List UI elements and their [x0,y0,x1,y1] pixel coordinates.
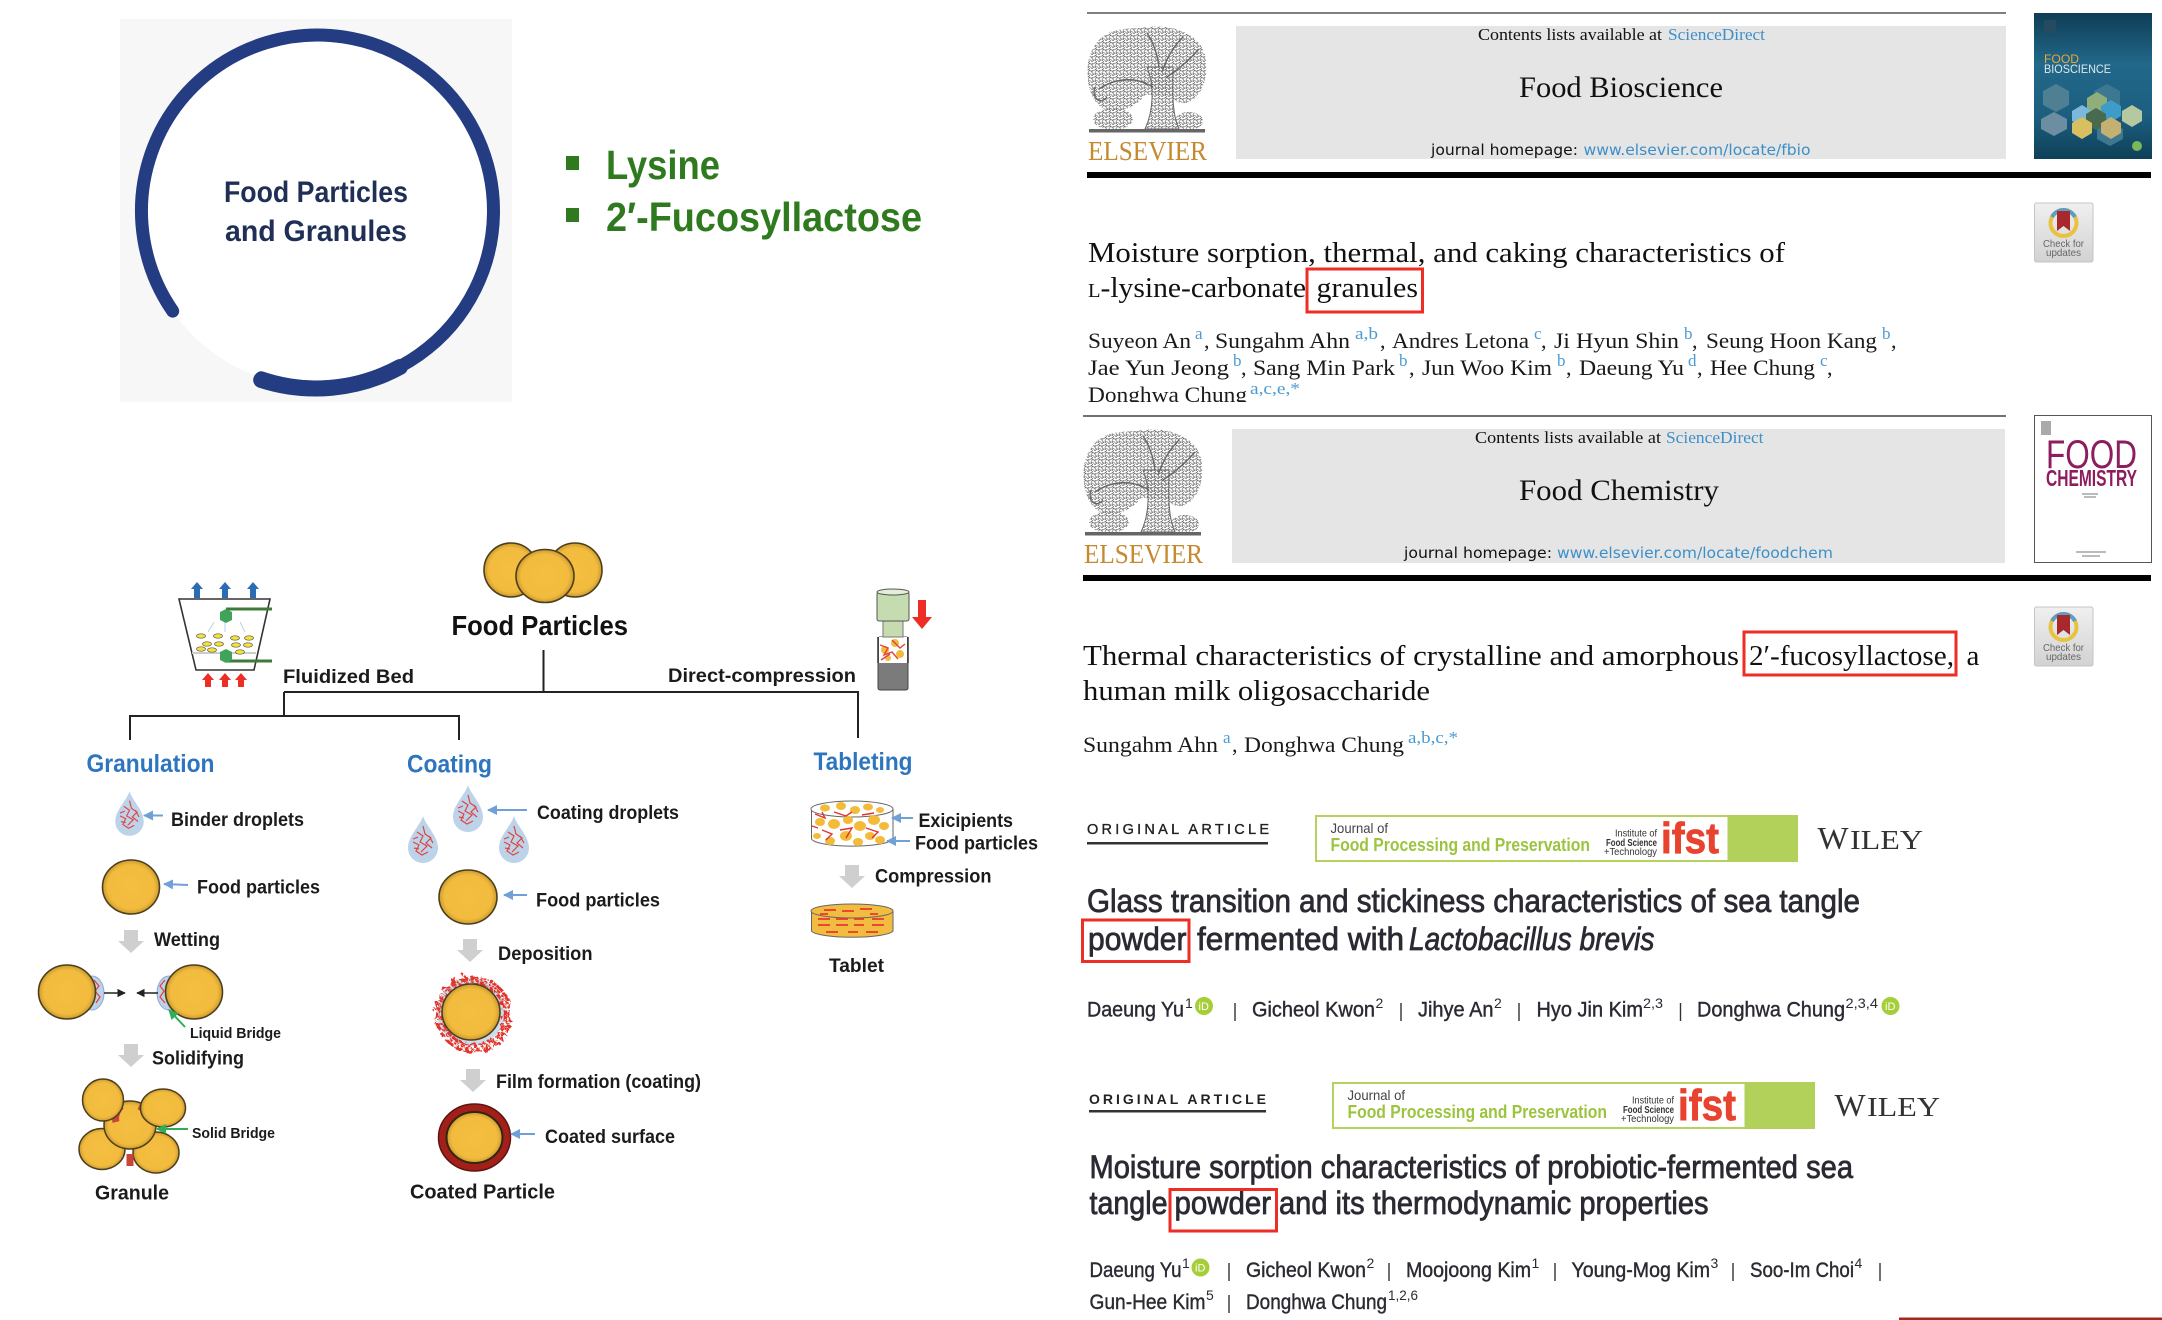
highlight box: granules [1307,269,1422,312]
journal banner: Food Chemistry [1519,474,1719,507]
heading: food particles: Food Particles [452,610,628,641]
journal banner: Food Processing and Preservation [1330,835,1590,855]
authors: sea tangle article: Gicheol Kwon [1252,998,1375,1022]
logo: elsevier tree: ELSEVIER [1084,539,1203,569]
column: tableting [811,748,1038,977]
icon: granule [79,1079,186,1173]
heading: food particles and granules: and Granules [225,215,407,248]
icon: check for updates: updates [2046,651,2081,663]
heading: granulation: Granulation [86,750,214,778]
article title: sea tangle glass transition: fermented with [1197,921,1404,957]
article title: lysine granules [1088,237,1785,312]
arrow: binder droplet pointer [144,814,163,816]
authors: food bioscience article: a [1195,324,1203,343]
authors: sea tangle article: 1 [1185,995,1193,1011]
authors: food bioscience article: d [1688,351,1697,370]
journal banner: ScienceDirect [1668,25,1765,44]
journal cover: food chemistry [2034,416,2152,562]
article title: sea tangle glass transition: Lactobacillus brevis [1409,921,1654,957]
journal banner: Food Science [1606,838,1657,849]
authors: food bioscience article: , [1692,328,1698,353]
label: original article: ORIGINAL ARTICLE [1089,1091,1266,1107]
authors: food bioscience article: Suyeon An [1088,328,1191,353]
authors: food bioscience article: , [1241,355,1246,380]
icon: particle with deposited droplets [434,975,508,1049]
journal banner: ifst [1661,814,1719,863]
icon: check for updates: updates [2046,247,2081,259]
label: direct-compression: Direct-compression [668,666,856,687]
bullet list: lysine and fucosyllactose [566,142,922,240]
authors: food bioscience article: , [1204,328,1210,353]
icon: wetted particles with liquid bridge [38,965,222,1019]
label: granule: Granule [95,1182,169,1204]
arrow: coated surface pointer [511,1133,535,1135]
authors: food bioscience article: Jae Yun Jeong [1088,355,1229,380]
heading: coating: Coating [407,750,492,778]
label: solid bridge: Solid Bridge [192,1125,275,1142]
authors: probiotic sea tangle article: Young-Mog Kim [1572,1258,1710,1282]
journal banner: journal homepage: [1403,544,1552,562]
label: binder droplets: Binder droplets [171,810,304,831]
arrow: food particle pointer [504,894,527,896]
label: original article: ORIGINAL ARTICLE [1087,822,1269,838]
journal banner [1236,25,2006,159]
authors: probiotic sea tangle article: Daeung Yu [1090,1258,1182,1282]
arrow: film formation step [460,1069,486,1092]
arrow: wetting step [118,930,144,953]
authors: sea tangle article: iD [1198,1001,1209,1013]
icon: coated particle [438,1104,510,1171]
article title: fucosyllactose: 2′-fucosyllactose, [1749,640,1954,672]
bullet list: lysine and fucosyllactose: 2′-Fucosyllactose [606,194,922,240]
heading: food particles and granules [224,176,408,248]
authors: probiotic sea tangle article: 1 [1532,1255,1540,1271]
journal banner: www.elsevier.com/locate/fbio [1584,141,1810,159]
authors: sea tangle article: 2 [1494,995,1502,1011]
article title: probiotic sea tangle: tangle [1090,1185,1168,1221]
authors: sea tangle article: 2,3,4 [1846,995,1878,1011]
arrow: solidifying step [118,1044,144,1067]
label: food particles: Food particles [197,878,320,898]
journal banner: Food Bioscience [1519,71,1723,104]
diagram: food particle processing tree [38,543,1038,1204]
label: food particles: Food particles [915,834,1038,854]
authors: probiotic sea tangle article: iD [1195,1262,1205,1274]
black divider bar [1087,172,2151,178]
logo: wiley: ILEY [1850,825,1923,855]
article title: sea tangle glass transition: Glass transition and stickiness characteristics of sea tangle [1087,883,1860,919]
article title: probiotic sea tangle: Moisture sorption characteristics of probiotic-fermented sea [1090,1149,1853,1185]
panel: circle title card [120,19,512,402]
black divider bar [1083,575,2151,581]
bullet list: lysine and fucosyllactose: Lysine [606,142,720,188]
authors: food chemistry article: , [1232,732,1238,757]
highlight box: 2'-fucosyllactose [1744,632,1956,675]
authors: sea tangle article [1087,995,1900,1022]
authors: food bioscience article: , [1566,355,1572,380]
label: tablet: Tablet [829,956,885,977]
arrow: coating droplet pointer [488,809,527,811]
logo: wiley: W [1834,1087,1866,1123]
article title: fucosyllactose: a [1966,640,1980,672]
journal banner: ScienceDirect [1666,428,1764,447]
authors: probiotic sea tangle article: Gun-Hee Kim [1090,1290,1206,1314]
authors: food chemistry article: Donghwa Chung [1244,732,1404,757]
article header: food chemistry [1083,416,2152,581]
journal cover: food bioscience: BIOSCIENCE [2044,62,2111,76]
authors: food bioscience article: , [1891,328,1896,353]
authors: food chemistry article: Sungahm Ahn [1083,732,1218,757]
journal cover: food chemistry: FOOD [2046,433,2137,477]
icon: check for updates: Check for [2043,642,2084,654]
authors: food bioscience article: Daeung Yu [1579,355,1684,380]
label: coated particle: Coated Particle [410,1182,555,1204]
journal banner: Institute of [1632,1096,1674,1106]
authors: food bioscience article: Donghwa Chung [1088,382,1247,407]
article header: food bioscience [1087,13,2152,178]
authors: probiotic sea tangle article: 2 [1366,1255,1374,1271]
authors: food bioscience article [1088,324,1896,407]
journal banner [1232,428,2005,563]
article title: probiotic sea tangle: and its thermodynamic properties [1279,1185,1708,1221]
journal banner: ifst [1678,1081,1736,1130]
logo: elsevier tree [1087,26,1207,166]
icon: three food particles [484,543,602,602]
authors: food bioscience article: b [1557,351,1566,370]
article title: probiotic sea tangle: powder [1174,1185,1271,1221]
label: deposition: Deposition [498,944,592,965]
authors: food bioscience article: , [1380,328,1386,353]
journal banner: www.elsevier.com/locate/foodchem [1557,544,1833,562]
authors: food bioscience article: b [1882,324,1890,343]
label: solidifying: Solidifying [152,1048,244,1070]
authors: sea tangle article: Jihye An [1418,998,1494,1022]
journal banner: Journal of [1348,1087,1405,1103]
icon: binder droplet [115,791,144,836]
authors: probiotic sea tangle article: Donghwa Chung [1246,1290,1387,1314]
article title: fucosyllactose: Thermal characteristics of crystalline and amorphous [1083,640,1739,672]
icon: food particle [102,860,160,914]
icon: excipient and particle mix [811,801,893,846]
journal banner: +Technology [1604,847,1657,858]
bottom corner red bar [1899,1318,2162,1320]
journal cover: food bioscience: FOOD [2044,52,2079,66]
authors: food bioscience article: c [1820,351,1828,370]
authors: sea tangle article: Hyo Jin Kim [1536,998,1643,1022]
article title: sea tangle glass transition: powder [1088,921,1187,957]
icon: open blue ring [141,35,493,387]
icon: coating droplets [408,785,529,863]
column: coating [407,750,701,1204]
article header: jfpp first [1087,814,1923,863]
authors: food bioscience article: Seung Hoon Kang [1706,328,1877,353]
journal banner: Journal of [1330,820,1388,836]
arrow: food particles pointer [887,840,910,842]
article title: fucosyllactose [1083,632,1980,707]
authors: food chemistry article [1083,728,1458,757]
journal cover: food bioscience [2034,13,2152,159]
journal banner: Food Science [1623,1105,1674,1116]
authors: probiotic sea tangle article: 4 [1854,1255,1862,1271]
article title: lysine granules: Moisture sorption, thermal, and caking characteristics of [1088,237,1785,269]
logo: elsevier tree: ELSEVIER [1088,136,1207,166]
journal banner [1333,1081,1815,1130]
journal banner: journal homepage: [1430,141,1578,159]
arrow: liquid bridge pointer [169,1010,185,1027]
authors: food chemistry article: a,b,c,* [1408,728,1458,747]
icon: check for updates: Check for [2043,238,2084,250]
authors: food bioscience article: Jun Woo Kim [1422,355,1552,380]
article header: jfpp second [1089,1081,1940,1130]
authors: food bioscience article: Ji Hyun Shin [1554,328,1679,353]
authors: food bioscience article: c [1534,324,1542,343]
arrow: solid bridge pointer [157,1128,188,1130]
journal banner [1316,814,1798,863]
arrow: deposition step [457,939,483,962]
label: coated surface: Coated surface [545,1127,675,1148]
authors: probiotic sea tangle article: 3 [1710,1255,1718,1271]
column: granulation [38,750,320,1204]
logo: wiley [1834,1087,1940,1123]
authors: probiotic sea tangle article [1090,1255,1880,1314]
authors: probiotic sea tangle article: 1,2,6 [1388,1287,1418,1303]
article title: lysine granules: L-lysine-carbonate [1088,272,1306,304]
authors: probiotic sea tangle article: Moojoong Kim [1406,1258,1531,1282]
article title: lysine granules: granules [1316,272,1418,304]
journal banner: Contents lists available at [1475,428,1661,447]
authors: food bioscience article: , [1827,355,1832,380]
icon: check for updates [2034,203,2093,262]
authors: food bioscience article: Sungahm Ahn [1215,328,1350,353]
icon: food particle [439,870,497,924]
label: film formation: Film formation (coating) [496,1072,701,1093]
label: food particles: Food particles [536,890,660,912]
highlight box: powder [1170,1190,1276,1231]
heading: tableting: Tableting [814,748,912,776]
authors: sea tangle article: Donghwa Chung [1697,998,1845,1022]
authors: probiotic sea tangle article: Soo-Im Choi [1750,1258,1854,1282]
logo: wiley [1818,820,1923,856]
label: compression: Compression [875,866,992,888]
authors: food bioscience article: b [1684,324,1692,343]
authors: probiotic sea tangle article: 5 [1206,1287,1214,1303]
authors: food bioscience article: a,b [1355,324,1378,343]
highlight box: powder [1082,920,1189,962]
journal banner: Food Processing and Preservation [1348,1102,1607,1122]
authors: food bioscience article: b [1399,351,1408,370]
article title: sea tangle glass transition [1082,883,1860,962]
journal banner: Contents lists available at [1478,25,1662,44]
authors: food bioscience article: a,c,e,* [1250,379,1300,398]
icon: tablet [811,904,893,937]
icon: thicker lower ring segment [261,367,400,389]
label: liquid bridge: Liquid Bridge [190,1025,281,1042]
journal banner: +Technology [1621,1114,1674,1125]
icon: compression punch and die [877,589,932,690]
authors: sea tangle article: 2 [1376,995,1384,1011]
logo: wiley: W [1818,820,1849,856]
authors: food bioscience article: Andres Letona [1392,328,1529,353]
logo: wiley: ILEY [1867,1092,1940,1122]
authors: food bioscience article: b [1233,351,1242,370]
authors: food bioscience article: , [1697,355,1702,380]
arrow: food particle pointer [164,884,188,885]
article title: probiotic sea tangle [1090,1149,1853,1231]
label: fluidized bed: Fluidized Bed [283,667,414,688]
tree connector lines [130,650,858,740]
label: coating droplets: Coating droplets [537,803,679,824]
article title: fucosyllactose: human milk oligosaccharide [1083,675,1430,707]
label: excipients: Exicipients [918,811,1013,832]
authors: food bioscience article: Sang Min Park [1253,355,1395,380]
authors: probiotic sea tangle article: Gicheol Kwon [1246,1258,1366,1282]
arrow: compression step [839,865,865,888]
heading: food particles and granules: Food Particles [224,176,408,209]
icon: fluidized bed [179,582,272,687]
journal banner: Institute of [1615,828,1657,840]
authors: food bioscience article: Hee Chung [1710,355,1815,380]
arrow: excipients pointer [892,817,913,819]
icon: check for updates [2034,607,2093,666]
authors: food bioscience article: , [1541,328,1546,353]
authors: probiotic sea tangle article: 1 [1182,1255,1190,1271]
authors: sea tangle article: 2,3 [1643,995,1663,1011]
label: wetting: Wetting [154,930,220,951]
authors: sea tangle article: iD [1885,1001,1895,1013]
authors: food bioscience article: , [1409,355,1414,380]
authors: sea tangle article: Daeung Yu [1087,998,1184,1022]
authors: food chemistry article: a [1223,728,1231,747]
logo: elsevier tree [1083,429,1203,569]
